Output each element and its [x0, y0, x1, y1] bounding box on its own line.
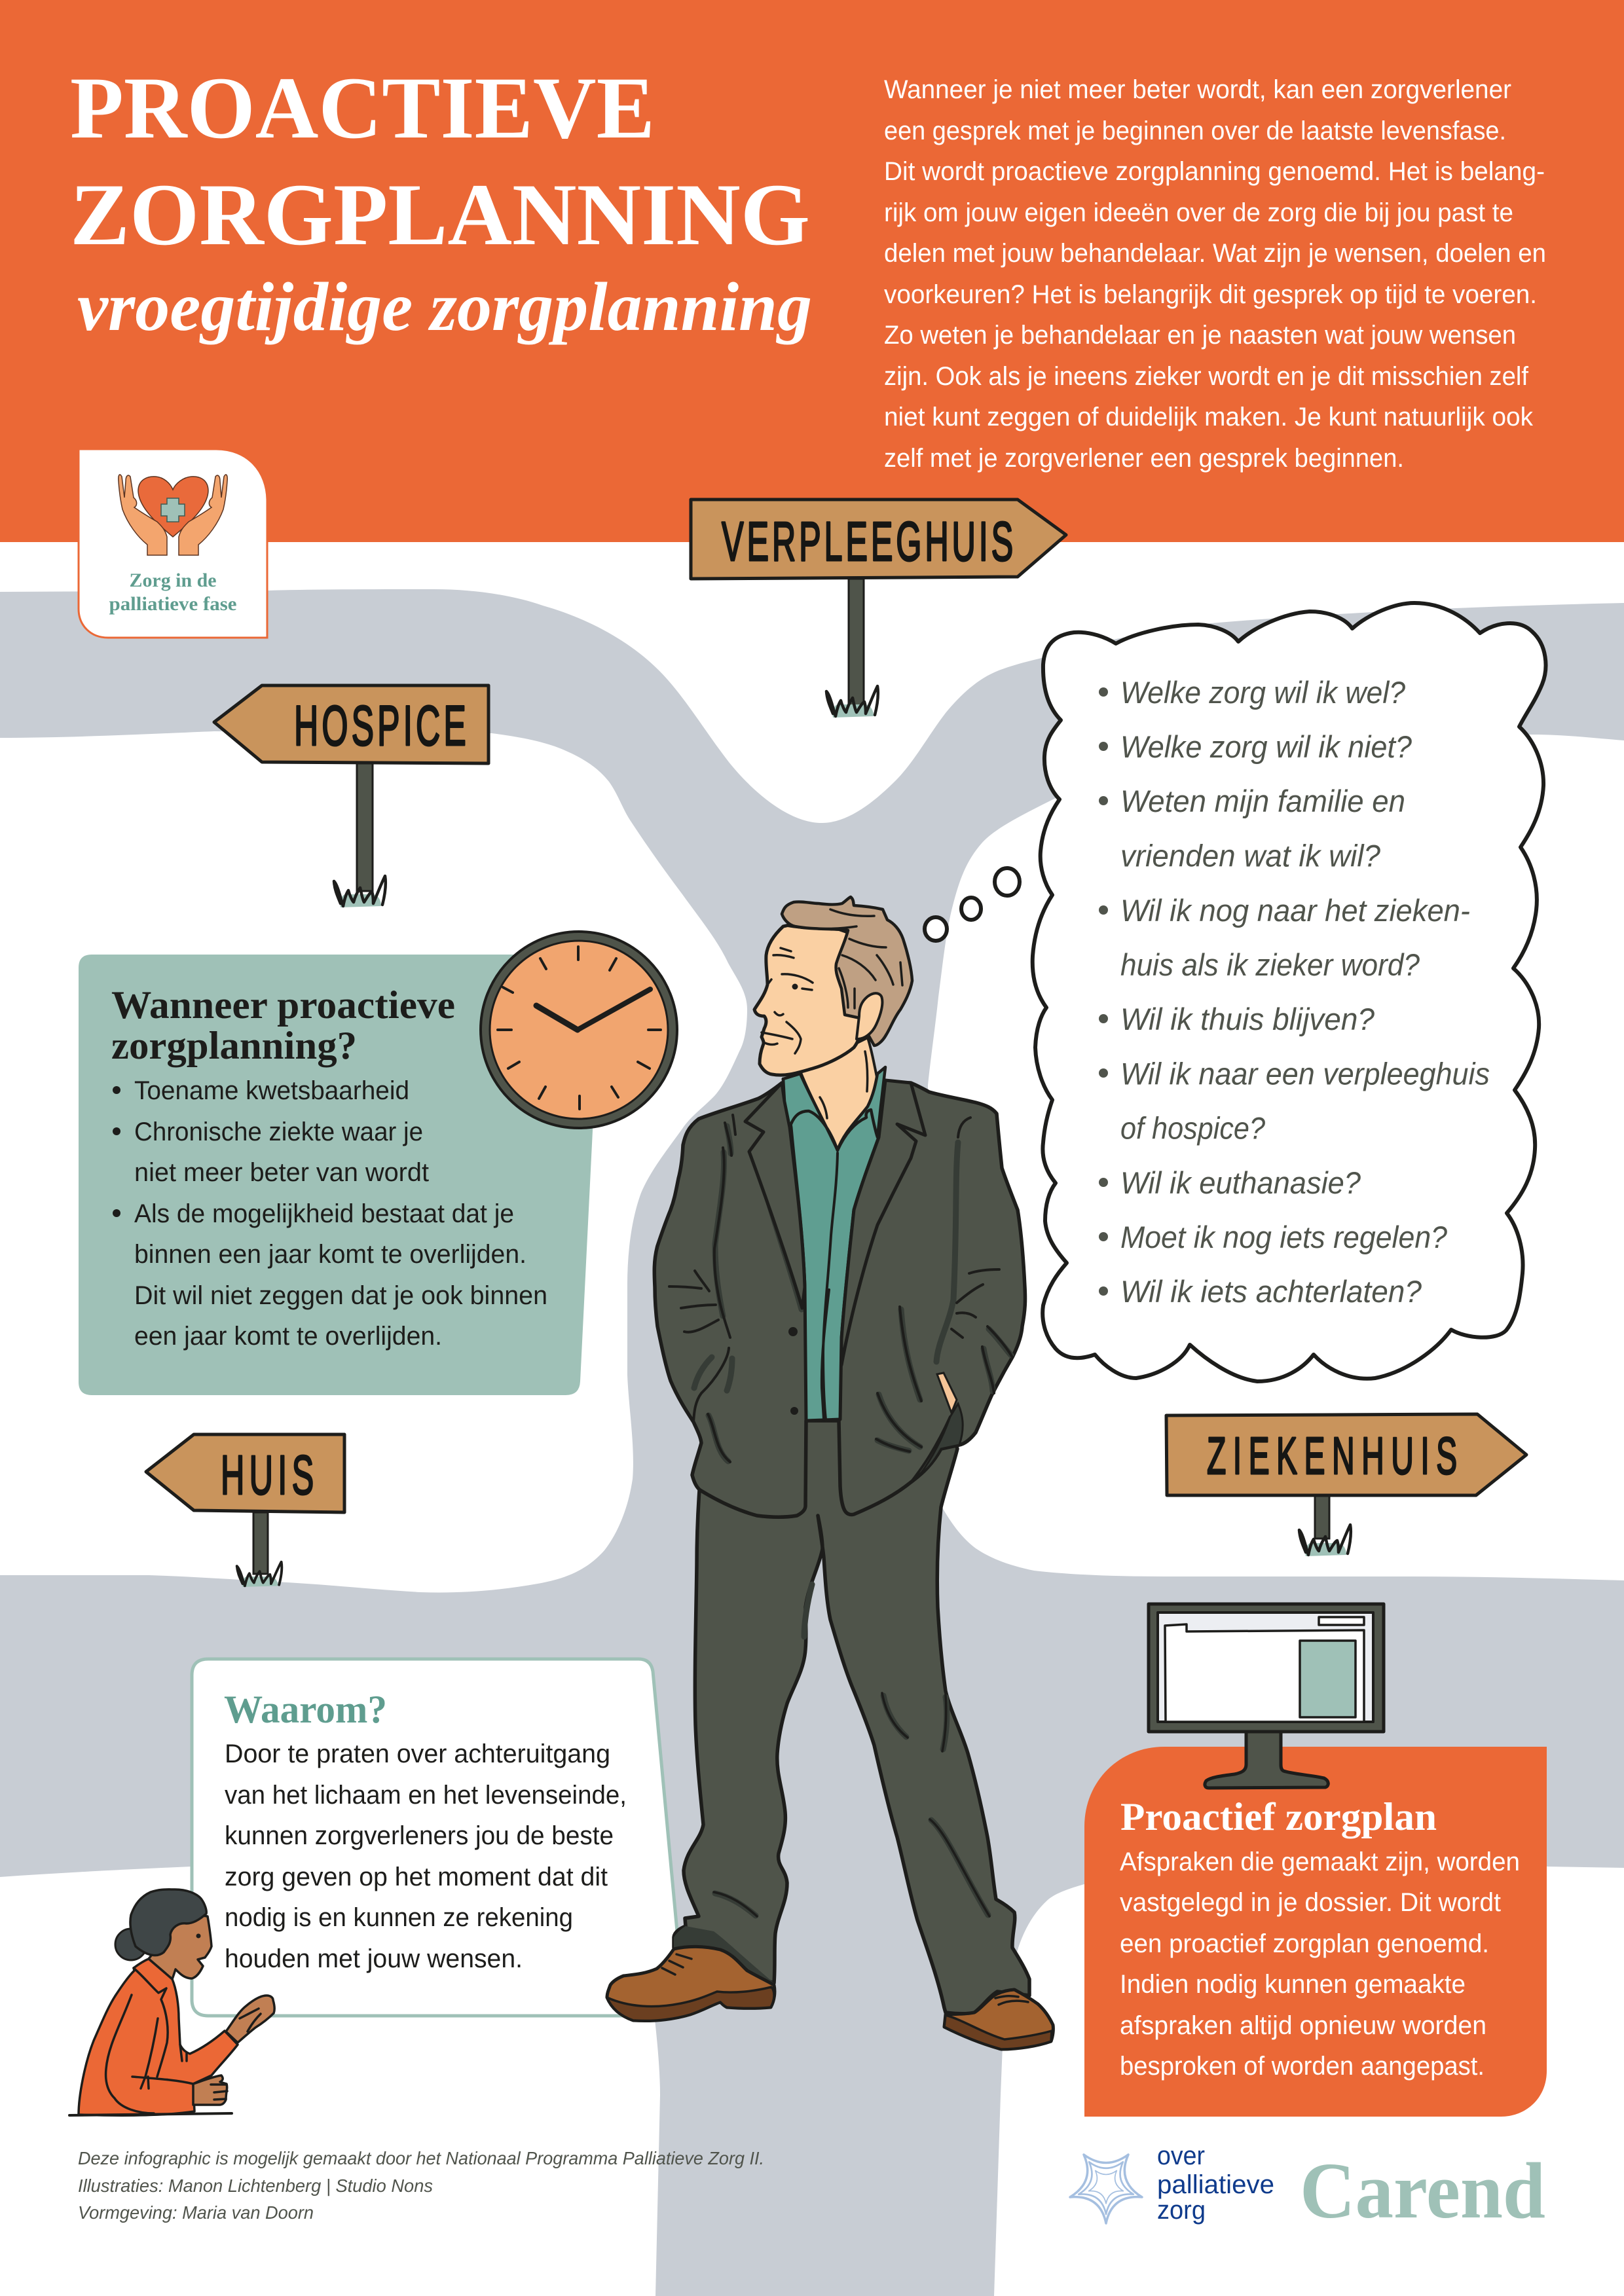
bullet list: een jaar komt te overlijden.: [134, 1322, 442, 1351]
ear: [857, 993, 882, 1039]
sign: verpleeghuis: [691, 500, 1066, 718]
jacket shadows and folds: [669, 1115, 1012, 1482]
icon: computer monitor: [1149, 1604, 1384, 1788]
panel: wanneer proactieve zorgplanning: [79, 955, 593, 1395]
sign: hospice: HOSPICE: [294, 695, 466, 757]
logo: over palliatieve zorg: [1070, 2141, 1274, 2225]
heading: Waarom?: [224, 1688, 387, 1731]
bubble questions: Weten mijn familie en: [1120, 784, 1405, 818]
footer credits: Vormgeving: Maria van Doorn: [78, 2202, 314, 2223]
intro text: voorkeuren? Het is belangrijk dit gesprek op tijd te voeren.: [884, 280, 1537, 309]
badge text: palliatieve fase: [109, 593, 237, 615]
bubble questions: Wil ik nog naar het zieken-: [1120, 893, 1470, 928]
sign: ziekenhuis: [1166, 1414, 1526, 1556]
shoes: [607, 1946, 1053, 2049]
badge text: [109, 570, 237, 615]
logo wordmark: zorg: [1157, 2196, 1206, 2225]
icon: clock: [481, 932, 677, 1128]
shirt: [783, 1079, 885, 1421]
body text: houden met jouw wensen.: [225, 1944, 523, 1973]
heading: zorgplanning?: [111, 1024, 357, 1067]
heading: [111, 983, 455, 1067]
body text: kunnen zorgverleners jou de beste: [225, 1821, 614, 1850]
logo wordmark: over: [1157, 2141, 1205, 2170]
thought bubble: [1033, 603, 1545, 1381]
title: PROACTIEVE: [70, 60, 655, 157]
bullet list: Dit wil niet zeggen dat je ook binnen: [134, 1281, 547, 1310]
footer credits: Deze infographic is mogelijk gemaakt door het Nationaal Programma Palliatieve Zorg II.: [78, 2148, 764, 2168]
intro text: rijk om jouw eigen ideeën over de zorg die bij jou past te: [884, 198, 1513, 227]
intro text: Wanneer je niet meer beter wordt, kan een zorgverlener: [884, 75, 1511, 104]
trousers: [674, 1394, 1029, 2014]
intro text: [884, 75, 1546, 473]
body text: besproken of worden aangepast.: [1120, 2052, 1485, 2081]
body text: een proactief zorgplan genoemd.: [1120, 1929, 1489, 1958]
bubble questions: Wil ik naar een verpleeghuis: [1120, 1056, 1490, 1091]
footer credits: [78, 2148, 764, 2223]
sign: hospice: [214, 685, 489, 907]
logo: Carend: Carend: [1300, 2147, 1545, 2235]
body text: [225, 1740, 627, 1973]
bubble questions: Wil ik euthanasie?: [1120, 1165, 1361, 1200]
footer credits: Illustraties: Manon Lichtenberg | Studio Nons: [78, 2176, 433, 2196]
bubble questions: huis als ik zieker word?: [1120, 947, 1420, 982]
bullet list: Als de mogelijkheid bestaat dat je: [134, 1199, 514, 1228]
heading: Wanneer proactieve: [111, 983, 455, 1027]
bubble questions: Wil ik iets achterlaten?: [1120, 1274, 1422, 1309]
intro text: een gesprek met je beginnen over de laatste levensfase.: [884, 117, 1506, 145]
buttons: [788, 1327, 798, 1415]
illustration: woman: [69, 1889, 274, 2115]
bubble questions: Wil ik thuis blijven?: [1120, 1002, 1375, 1036]
neck: [800, 1038, 877, 1150]
hair: [782, 897, 912, 1046]
bubble questions: [1099, 675, 1490, 1309]
face details: [792, 983, 798, 990]
body text: [1120, 1848, 1520, 2081]
panel: proactief zorgplan: [1084, 1747, 1547, 2117]
bubble questions: Welke zorg wil ik wel?: [1120, 675, 1405, 710]
body text: zorg geven op het moment dat dit: [225, 1863, 608, 1891]
bullet list: Toename kwetsbaarheid: [134, 1076, 409, 1105]
body text: Afspraken die gemaakt zijn, worden: [1120, 1848, 1520, 1876]
bubble questions: Moet ik nog iets regelen?: [1120, 1220, 1447, 1254]
sign: huis: [146, 1434, 344, 1587]
bubble questions: of hospice?: [1120, 1111, 1265, 1146]
body text: Door te praten over achteruitgang: [225, 1740, 610, 1768]
bubble questions: vrienden wat ik wil?: [1120, 839, 1380, 873]
body text: afspraken altijd opnieuw worden: [1120, 2011, 1486, 2040]
body text: vastgelegd in je dossier. Dit wordt: [1120, 1888, 1501, 1917]
illustration: man standing: [607, 897, 1053, 2049]
body text: Indien nodig kunnen gemaakte: [1120, 1970, 1466, 1999]
bubble questions: Welke zorg wil ik niet?: [1120, 729, 1412, 764]
icon: heart with cross in hands: [119, 475, 227, 555]
intro text: delen met jouw behandelaar. Wat zijn je wensen, doelen en: [884, 239, 1546, 268]
logo wordmark: palliatieve: [1157, 2170, 1274, 2199]
logo wordmark: [1157, 2141, 1274, 2225]
bullet list: niet meer beter van wordt: [134, 1158, 429, 1187]
panel: orange header: [0, 0, 1624, 542]
shirt collar: [783, 1074, 838, 1150]
icon: star: [1070, 2155, 1142, 2223]
heading: Proactief zorgplan: [1120, 1795, 1437, 1838]
sign: verpleeghuis: VERPLEEGHUIS: [722, 511, 1013, 572]
badge: Zorg in de palliatieve fase: [79, 449, 267, 638]
title: vroegtijdige zorgplanning: [77, 268, 812, 345]
panel: waarom: [192, 1659, 685, 2016]
head: [754, 897, 912, 1075]
intro text: Dit wordt proactieve zorgplanning genoemd. Het is belang-: [884, 157, 1545, 186]
sign: huis: HUIS: [221, 1444, 314, 1506]
body text: nodig is en kunnen ze rekening: [225, 1903, 573, 1932]
intro text: zelf met je zorgverlener een gesprek beginnen.: [884, 444, 1404, 473]
intro text: zijn. Ook als je ineens zieker wordt en je dit misschien zelf: [884, 362, 1529, 391]
background: grey roads: [0, 524, 1624, 2296]
body text: van het lichaam en het levenseinde,: [225, 1781, 627, 1810]
jacket: [654, 1083, 1025, 1517]
bullet list: binnen een jaar komt te overlijden.: [134, 1240, 526, 1269]
intro text: Zo weten je behandelaar en je naasten wat jouw wensen: [884, 321, 1516, 350]
badge text: Zorg in de: [130, 570, 216, 591]
lapels: [745, 1083, 805, 1308]
title: [70, 60, 812, 345]
bullet list: Chronische ziekte waar je: [134, 1118, 423, 1146]
hand in pocket: [937, 1373, 957, 1413]
thought bubble circles: [925, 868, 1020, 941]
intro text: niet kunt zeggen of duidelijk maken. Je kunt natuurlijk ook: [884, 403, 1534, 431]
title: ZORGPLANNING: [70, 166, 810, 264]
bullet list: [113, 1076, 547, 1351]
sign: ziekenhuis: ZIEKENHUIS: [1207, 1426, 1457, 1485]
